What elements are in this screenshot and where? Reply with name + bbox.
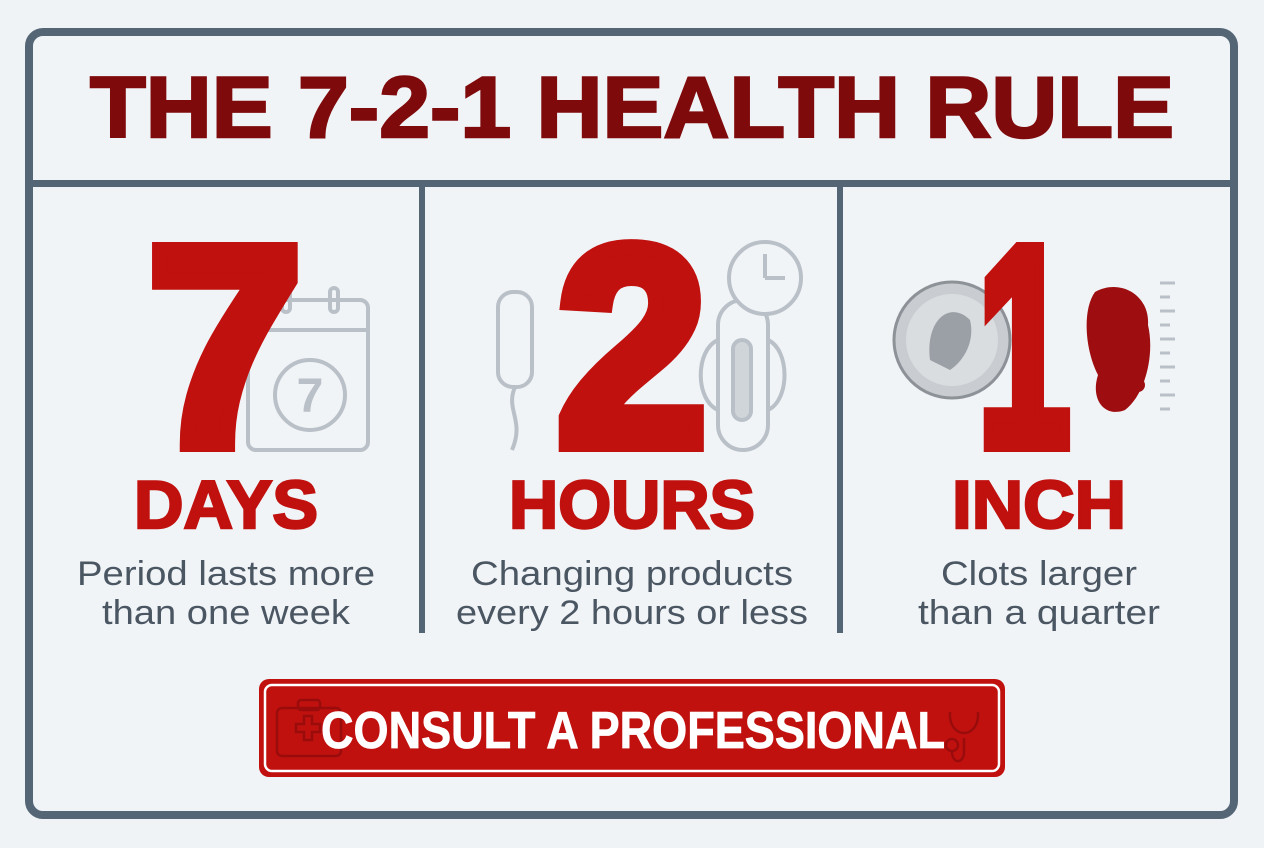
icon: clot (1087, 287, 1150, 412)
description: Period lasts more (77, 555, 375, 593)
button: consult a professional (259, 679, 1005, 777)
panel: 2 hours: every 2 hours or less (456, 594, 808, 632)
big number 7: 7 (148, 189, 302, 504)
panel: 7 days: than one week (102, 594, 351, 632)
panel: 2 hours: HOURS (509, 467, 755, 543)
icon: ruler (1160, 283, 1175, 409)
icon: quarter (894, 282, 1010, 398)
panel: 1 inch: than a quarter (918, 594, 1160, 632)
label DAYS: DAYS (134, 467, 318, 543)
icon: pad (701, 242, 801, 450)
panel: 1 inch (894, 189, 1175, 632)
panel: 2 hours (456, 189, 808, 632)
big number 1: 1 (978, 189, 1070, 504)
panel: 2 hours: Changing products (471, 555, 793, 593)
icon: calendar (248, 288, 368, 450)
panel: 7 days (77, 189, 375, 632)
big number 2: 2 (557, 189, 707, 504)
icon: tampon (498, 292, 532, 450)
title: THE 7-2-1 HEALTH RULE (90, 60, 1174, 156)
panel: 1 inch: Clots larger (941, 555, 1137, 593)
icon: medical kit (277, 700, 341, 756)
button: consult a professional: CONSULT A PROFESSIONAL (321, 702, 945, 760)
panel: 1 inch: INCH (952, 467, 1126, 543)
icon: stethoscope (946, 712, 978, 761)
icon: calendar: 7 (297, 370, 323, 423)
